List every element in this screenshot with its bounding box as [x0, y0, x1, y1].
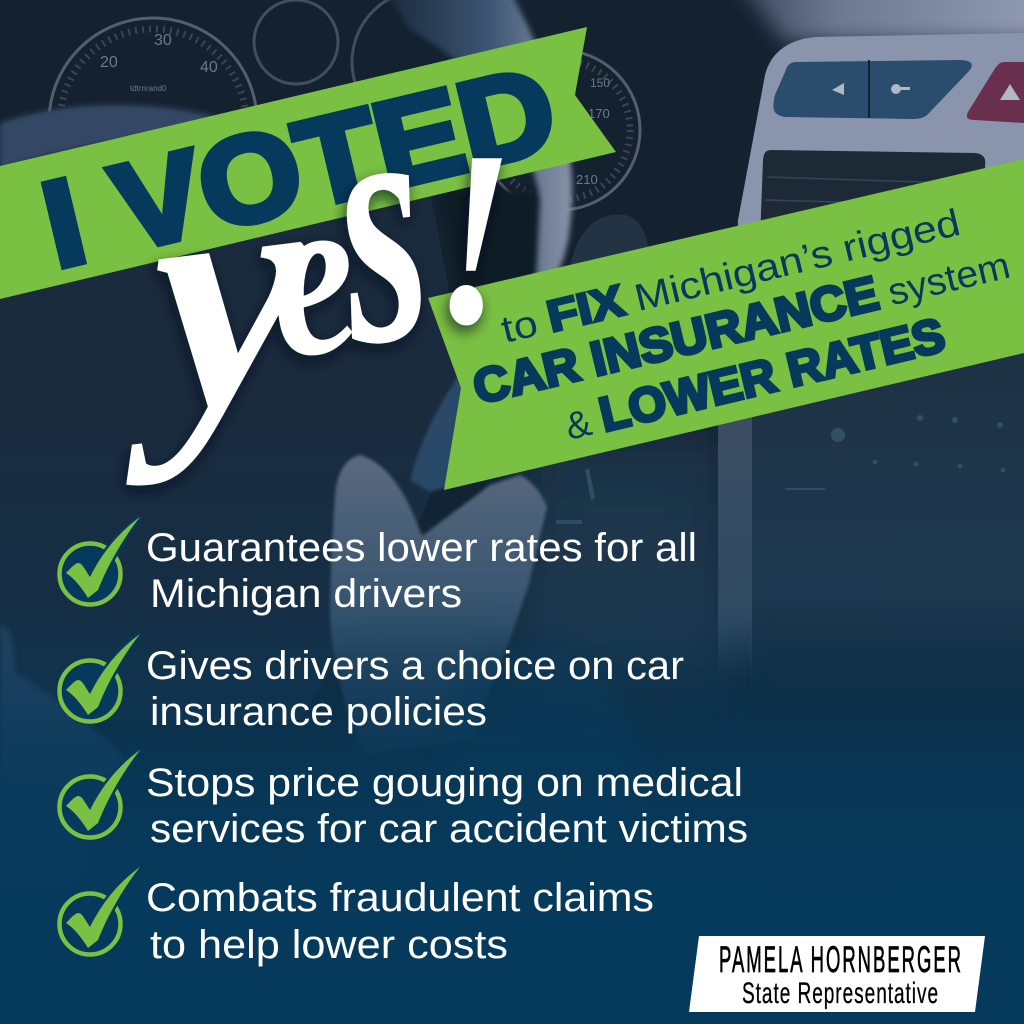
- item 2: choice: [60, 634, 684, 734]
- item 1: lower rates: [60, 517, 697, 616]
- item 1: lower rates: Guarantees lower rates for all: [146, 526, 697, 570]
- icon: check mark: [60, 634, 140, 722]
- icon: check mark: [60, 750, 140, 838]
- driver hand: [330, 455, 547, 755]
- item 4: fraud: [60, 867, 654, 967]
- script word: yes!: y: [110, 98, 315, 489]
- instrument gauges: 170: [588, 106, 610, 121]
- subheading line 2: CAR INSURANCE system: [468, 236, 1015, 415]
- instrument gauges: 30: [154, 32, 172, 49]
- item 3: price gouging: Stops price gouging on medical: [146, 761, 743, 805]
- driver sleeve: [440, 646, 637, 860]
- subheading line 1: to FIX Michigan’s rigged: [496, 196, 965, 353]
- script word: yes!: !: [434, 100, 514, 377]
- steering wheel rim and hub: [0, 106, 470, 720]
- checklist: [60, 517, 748, 967]
- item 4: fraud: to help lower costs: [150, 923, 508, 967]
- item 1: lower rates: Michigan drivers: [150, 572, 462, 616]
- instrument gauges: 40: [200, 59, 218, 76]
- item 3: price gouging: [60, 750, 748, 851]
- instrument gauges: 210: [576, 172, 598, 187]
- right dash panel: [720, 0, 1024, 42]
- icon: check mark: [60, 867, 140, 954]
- green banner: I voted: [0, 27, 616, 299]
- instrument gauges: [49, 0, 640, 226]
- driver left arm: [0, 623, 125, 900]
- item 3: price gouging: services for car accident victims: [150, 807, 748, 851]
- instrument gauges: tdtrnrand0: [130, 84, 167, 93]
- signature box: [689, 936, 985, 1012]
- item 2: choice: Gives drivers a choice on car: [146, 644, 684, 688]
- instrument gauges: 150: [590, 76, 610, 90]
- blue fade over photo: [0, 420, 1024, 900]
- script word: yes!: e: [251, 140, 372, 409]
- heading: I VOTED: I VOTED: [31, 40, 568, 293]
- icon: check mark: [60, 517, 140, 604]
- item 4: fraud: Combats fraudulent claims: [146, 876, 654, 920]
- green banner: fix car insurance: [428, 159, 1024, 490]
- subheading line 3: & LOWER RATES: [559, 309, 950, 451]
- script word: yes!: [110, 24, 514, 489]
- steering stalk: [410, 360, 470, 492]
- item 2: choice: insurance policies: [150, 690, 487, 734]
- lower centre console: [520, 430, 730, 720]
- instrument gauges: 20: [100, 54, 118, 71]
- script word: yes!: s: [307, 24, 448, 419]
